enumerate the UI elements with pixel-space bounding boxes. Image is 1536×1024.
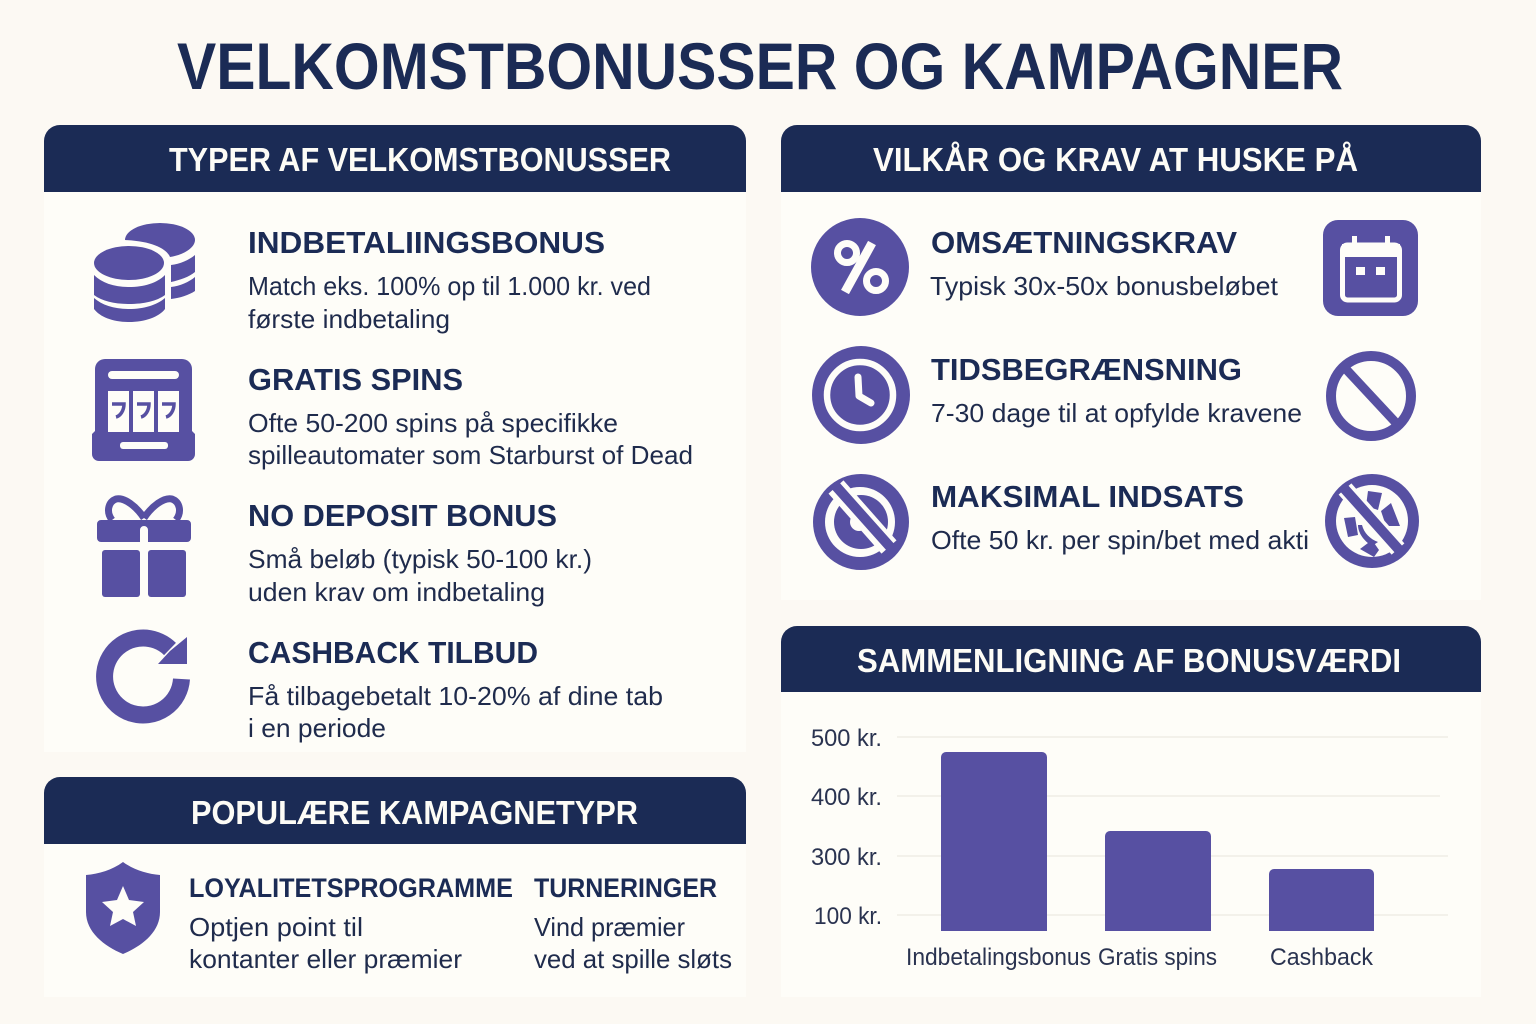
text: maximum bet: MAKSIMAL INDSATS bbox=[931, 479, 1244, 514]
panel header: types: TYPER AF VELKOMSTBONUSSER bbox=[169, 141, 671, 178]
text: cashback: CASHBACK TILBUD bbox=[248, 635, 538, 670]
panel: bonus value comparison bbox=[781, 626, 1481, 997]
y axis labels: 100 kr. bbox=[814, 903, 882, 930]
y axis labels bbox=[811, 725, 882, 930]
text: no deposit bonus: NO DEPOSIT BONUS bbox=[248, 498, 557, 533]
panel: popular campaign types bbox=[44, 777, 746, 997]
x axis labels: Indbetalingsbonus bbox=[906, 944, 1091, 971]
text: time limit: 7-30 dage til at opfylde kravene bbox=[931, 398, 1302, 428]
text: maximum bet: Ofte 50 kr. per spin/bet med akti bbox=[931, 525, 1309, 555]
text: wagering requirement: OMSÆTNINGSKRAV bbox=[931, 225, 1237, 260]
panel header: campaigns bbox=[44, 777, 746, 844]
text: deposit bonus: første indbetaling bbox=[248, 304, 450, 334]
text: free spins: Ofte 50-200 spins på specifikke bbox=[248, 408, 618, 438]
text: cashback bbox=[248, 635, 663, 743]
panel header: terms bbox=[781, 125, 1481, 192]
icon: calendar bbox=[1323, 220, 1418, 316]
title: VELKOMSTBONUSSER OG KAMPAGNER bbox=[177, 29, 1343, 103]
text: tournaments: TURNERINGER bbox=[534, 873, 717, 903]
text: tournaments: Vind præmier bbox=[534, 912, 685, 942]
text: loyalty programmes: LOYALITETSPROGRAMME bbox=[189, 873, 513, 903]
text: cashback: i en periode bbox=[248, 713, 386, 743]
icon: gift bbox=[97, 499, 191, 597]
text: tournaments bbox=[534, 873, 732, 974]
panel header: types bbox=[44, 125, 746, 192]
panel: terms and requirements bbox=[781, 125, 1481, 600]
text: no deposit bonus: Små beløb (typisk 50-100 kr.) bbox=[248, 544, 592, 574]
icon: percent bbox=[811, 218, 909, 316]
icon: cashback arrow bbox=[105, 637, 187, 715]
text: wagering requirement: Typisk 30x-50x bonusbeløbet bbox=[930, 271, 1279, 301]
text: deposit bonus bbox=[248, 225, 651, 334]
x axis labels: Cashback bbox=[1270, 944, 1374, 971]
x axis labels: Gratis spins bbox=[1098, 944, 1217, 971]
text: deposit bonus: Match eks. 100% op til 1.000 kr. ved bbox=[248, 271, 651, 301]
text: cashback: Få tilbagebetalt 10-20% af dine tab bbox=[248, 681, 663, 711]
text: maximum bet bbox=[931, 479, 1309, 555]
y axis labels: 400 kr. bbox=[811, 784, 882, 811]
text: free spins: GRATIS SPINS bbox=[248, 362, 463, 397]
icon: prohibited sign bbox=[1331, 356, 1411, 436]
text: time limit bbox=[931, 352, 1302, 428]
text: no deposit bonus: uden krav om indbetaling bbox=[248, 577, 545, 607]
panel: types of welcome bonuses bbox=[44, 125, 746, 752]
y axis labels: 300 kr. bbox=[811, 844, 882, 871]
icon: shield star bbox=[86, 862, 160, 954]
panel header: terms: VILKÅR OG KRAV AT HUSKE PÅ bbox=[873, 141, 1358, 178]
icon: slot machine bbox=[92, 359, 195, 461]
panel header: campaigns: POPULÆRE KAMPAGNETYPR bbox=[191, 794, 638, 831]
icon: prohibited wheel bbox=[1325, 474, 1419, 568]
panel header: comparison: SAMMENLIGNING AF BONUSVÆRDI bbox=[857, 642, 1401, 679]
y axis labels: 500 kr. bbox=[811, 725, 882, 752]
text: loyalty programmes bbox=[189, 873, 513, 974]
bar chart bbox=[811, 725, 1448, 971]
text: no deposit bonus bbox=[248, 498, 592, 607]
text: loyalty programmes: Optjen point til bbox=[189, 912, 363, 942]
text: loyalty programmes: kontanter eller præmier bbox=[189, 944, 462, 974]
text: deposit bonus: INDBETALIINGSBONUS bbox=[248, 225, 605, 260]
text: tournaments: ved at spille sløts bbox=[534, 944, 732, 974]
x axis labels bbox=[906, 944, 1374, 971]
text: free spins: spilleautomater som Starburst of Dead bbox=[248, 440, 693, 470]
text: time limit: TIDSBEGRÆNSNING bbox=[931, 352, 1242, 387]
panel header: comparison bbox=[781, 626, 1481, 692]
text: wagering requirement bbox=[930, 225, 1279, 301]
icon: coins bbox=[94, 223, 195, 322]
icon: prohibited chip bbox=[813, 474, 909, 570]
text: free spins bbox=[248, 362, 693, 470]
bars bbox=[941, 752, 1374, 931]
icon: clock bbox=[812, 346, 910, 444]
